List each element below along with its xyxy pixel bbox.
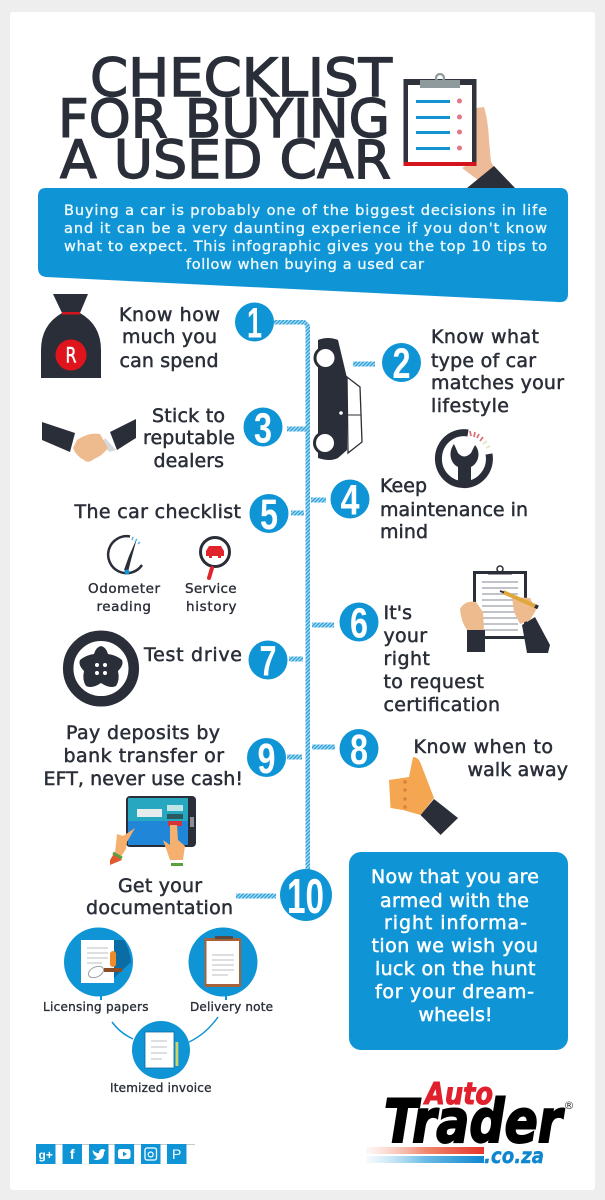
number 1 (235, 300, 274, 348)
number 9 (247, 735, 286, 783)
icon: tyre (68, 636, 134, 701)
closing callout: tion we wish you (372, 935, 538, 957)
step 10 heading: Get your (118, 875, 202, 897)
number 8: 8 (350, 726, 368, 774)
step 10 heading: documentation (86, 897, 233, 919)
closing callout (349, 852, 568, 1050)
step 6 text: right (384, 648, 430, 670)
number 9: 9 (258, 735, 276, 783)
intro banner: and it can be a very daunting experience if you don't know (64, 221, 547, 237)
number 5: 5 (260, 491, 278, 539)
step 10: documentation (43, 869, 332, 1095)
step 2 text: matches your (431, 372, 564, 394)
step 3 text (143, 405, 235, 472)
icon: thumbs up (389, 757, 458, 835)
service history label: Service (185, 581, 236, 597)
step 6 text: It's (384, 602, 412, 624)
icon: youtube (115, 1144, 134, 1164)
step 9 text: Pay deposits by (66, 722, 220, 744)
step 2 text: lifestyle (431, 395, 509, 417)
step 2 text: Know what (431, 326, 539, 348)
number 8 (340, 726, 378, 774)
icon: google plus (36, 1144, 56, 1164)
step 4 text: mind (380, 521, 428, 543)
icon: wrench dial (438, 431, 490, 487)
licensing papers: Licensing papers (43, 1000, 148, 1014)
step 8 text (414, 736, 568, 781)
icon: instagram (141, 1144, 160, 1164)
social icons (36, 1144, 195, 1164)
title: CHECKLIST (90, 48, 393, 109)
licensing papers (43, 928, 148, 1014)
closing callout: right informa- (384, 912, 527, 934)
step 5 heading: The car checklist (74, 501, 241, 523)
number 4: 4 (340, 476, 360, 524)
logo: Auto Trader (366, 1077, 574, 1168)
number 7 (248, 638, 288, 686)
number 2: 2 (392, 340, 410, 388)
icon: twitter (89, 1144, 108, 1164)
step 4: maintenance (330, 431, 528, 543)
icon: tablet and hands (110, 796, 196, 866)
closing callout: luck on the hunt (375, 958, 536, 980)
odometer label: reading (96, 599, 151, 615)
odometer label (88, 581, 160, 615)
step 6 text: certification (384, 694, 500, 716)
step 6 text: to request (384, 671, 484, 693)
number 3 (244, 404, 282, 452)
icon: odometer (108, 536, 142, 574)
itemized invoice (110, 1021, 212, 1095)
intro banner (38, 188, 568, 302)
step 2 text: type of car (431, 350, 536, 372)
closing callout: armed with the (380, 890, 529, 912)
step 4 text (380, 475, 528, 543)
icon: google plus: g+ (39, 1148, 53, 1162)
icon: money bag (41, 294, 101, 378)
odometer label: Odometer (88, 581, 160, 597)
step 3 text: reputable (143, 427, 235, 449)
number 2 (382, 340, 421, 388)
logo: Auto Trader: ® (564, 1099, 574, 1112)
logo: Auto Trader: Auto (423, 1077, 493, 1112)
logo: Auto Trader: Trader (384, 1087, 565, 1157)
number 4 (330, 476, 370, 524)
delivery note (188, 928, 273, 1014)
step 3: dealers (42, 404, 282, 472)
step 8: walk away (340, 726, 568, 835)
title: FOR BUYING (58, 89, 390, 150)
service history label: history (186, 599, 236, 615)
number 1: 1 (247, 300, 262, 348)
step 8 text: Know when to (414, 736, 553, 758)
step 9 text (44, 722, 243, 790)
icon: facebook (62, 1144, 82, 1164)
closing callout: wheels! (418, 1004, 492, 1026)
icon: handshake (42, 419, 136, 462)
step 7: test drive (68, 636, 288, 701)
icon: car (314, 338, 362, 460)
icon: pinterest: P (172, 1146, 181, 1162)
step 1: budget (41, 294, 274, 378)
closing callout: Now that you are (371, 866, 539, 888)
number 6: 6 (350, 600, 368, 648)
closing callout: for your dream- (375, 981, 534, 1003)
step 2 text (431, 326, 564, 417)
step 6 text (384, 602, 500, 716)
step 1 text (119, 304, 220, 372)
step 1 text: Know how (119, 304, 220, 326)
icon: money bag: R (66, 344, 76, 368)
step 6: certification (340, 566, 550, 716)
logo: Auto Trader: .co.za (484, 1144, 544, 1168)
number 10: 10 (287, 870, 324, 924)
step 4 text: Keep (380, 475, 427, 497)
step 1 text: much you (122, 326, 217, 348)
step 9 text: bank transfer or (64, 745, 224, 767)
intro banner: Buying a car is probably one of the biggest decisions in life (64, 203, 547, 219)
number 5 (250, 491, 288, 539)
step 8 text: walk away (468, 759, 568, 781)
icon: facebook: f (70, 1146, 75, 1162)
step 2: car type (314, 326, 564, 460)
number 3: 3 (254, 404, 272, 452)
service history label (185, 581, 236, 615)
title: A USED CAR (60, 130, 391, 191)
step 3 text: dealers (154, 450, 224, 472)
icon: clipboard and hands (460, 566, 550, 653)
intro banner: follow when buying a used car (186, 257, 424, 273)
icon: clipboard in hand (404, 74, 515, 188)
icon: service history magnifier (200, 538, 230, 578)
step 9 text: EFT, never use cash! (44, 768, 243, 790)
intro banner: what to expect. This infographic gives you the top 10 tips to (64, 239, 547, 255)
title (58, 48, 393, 191)
connector curves (112, 1017, 218, 1042)
delivery note: Delivery note (190, 1000, 273, 1014)
step 9: deposits (44, 722, 286, 866)
icon: pinterest (167, 1144, 186, 1164)
itemized invoice: Itemized invoice (110, 1081, 212, 1095)
number 7: 7 (260, 638, 276, 686)
step 7 text: Test drive (143, 644, 242, 666)
step 6 text: your (384, 625, 427, 647)
timeline with connectors (236, 320, 375, 898)
step 4 text: maintenance in (380, 499, 528, 521)
step 3 text: Stick to (152, 405, 225, 427)
step 1 text: can spend (120, 350, 218, 372)
step 5: car checklist (74, 491, 288, 615)
number 6 (340, 600, 378, 648)
step 10 heading (86, 875, 233, 919)
